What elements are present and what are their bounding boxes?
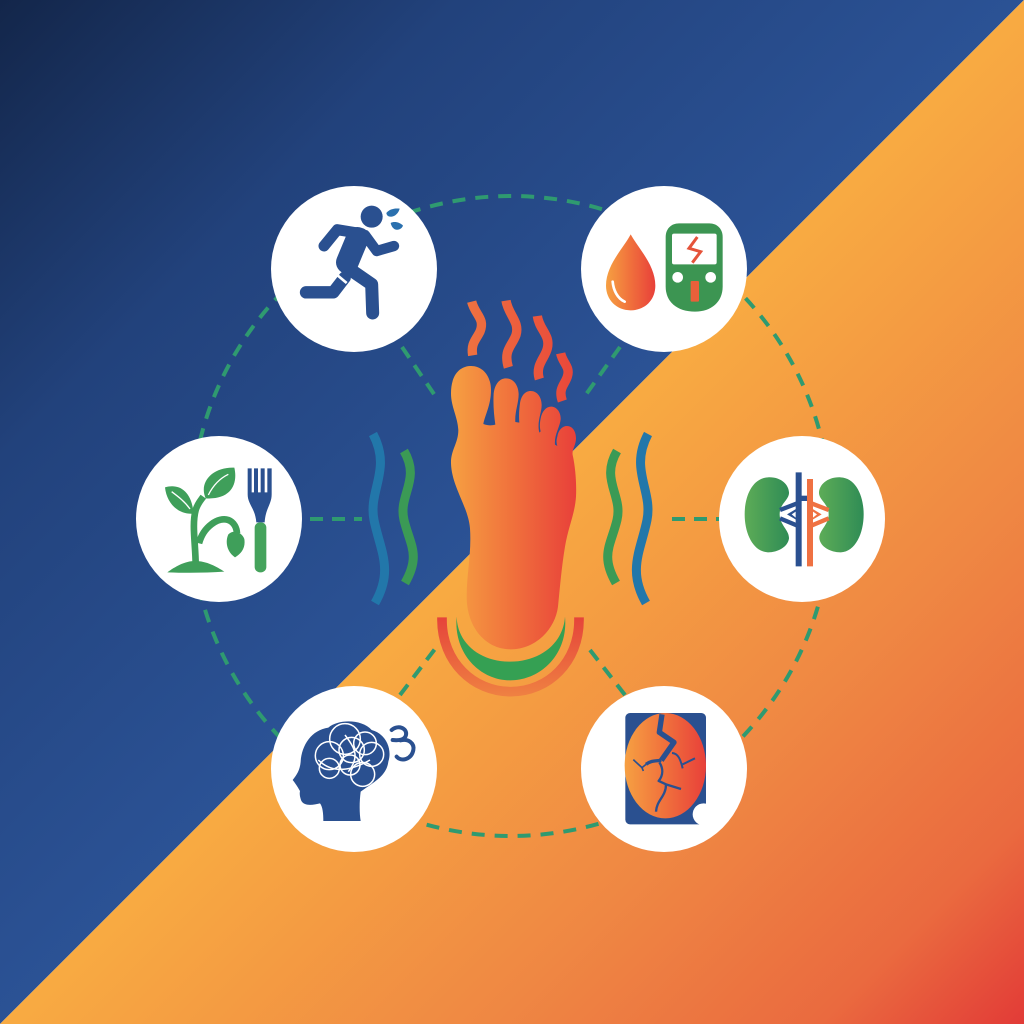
icon: sweating runner	[306, 206, 403, 313]
circle: blood sugar	[581, 186, 747, 352]
right wavy lines	[608, 434, 648, 603]
left wavy lines	[373, 434, 413, 603]
red arc	[442, 617, 579, 692]
icon: blood drop and glucose meter	[606, 223, 723, 312]
icon: plant and fork	[165, 468, 272, 573]
icon: cracked skin	[625, 713, 715, 827]
green crescent	[456, 617, 565, 680]
central foot illustration	[442, 301, 579, 692]
icon: kidneys with vessels	[745, 472, 864, 566]
heat waves	[472, 301, 568, 401]
foot	[451, 366, 576, 649]
circle: kidneys	[719, 436, 885, 602]
dashed spokes	[310, 347, 722, 695]
circle: cracked skin	[581, 686, 747, 852]
dashed connector ring	[191, 196, 831, 836]
circle: diet	[136, 436, 302, 602]
circle: stress	[271, 686, 437, 852]
circle: exercise	[271, 186, 437, 352]
icon: head with tangled thoughts	[293, 721, 414, 821]
